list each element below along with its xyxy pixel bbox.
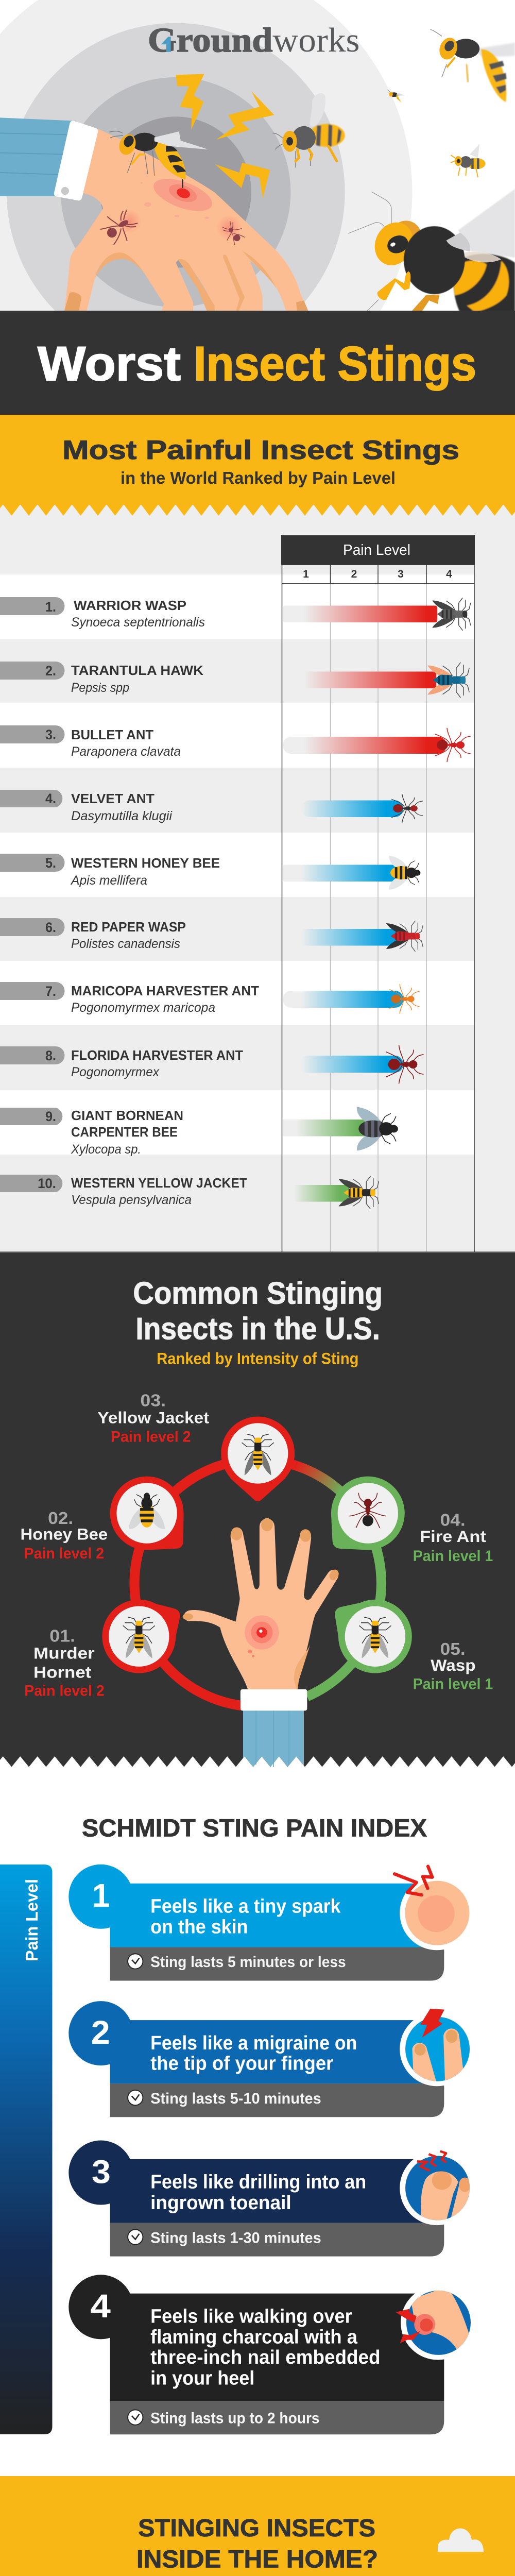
icon: western honey bee <box>389 856 420 890</box>
icon: giant bornean carpenter bee <box>357 1107 398 1150</box>
label: honey bee <box>21 1509 108 1562</box>
row 7: 7. <box>45 984 56 999</box>
section heading: SCHMIDT STING PAIN INDEX <box>82 1815 427 1842</box>
row 8: Pogonomyrmex <box>71 1065 160 1079</box>
section heading: Insects in the U.S. <box>135 1312 380 1346</box>
row 6 <box>0 918 186 951</box>
subtitle band <box>0 415 515 505</box>
row 9: 9. <box>45 1109 56 1124</box>
row 5: WESTERN HONEY BEE <box>71 855 220 871</box>
flying bee, mid <box>272 93 345 167</box>
row 3 <box>0 725 181 759</box>
row 4: Dasymutilla klugii <box>71 809 173 823</box>
label: fire ant <box>413 1511 493 1565</box>
icon: florida harvester ant <box>386 1045 423 1083</box>
row 2: Pepsis spp <box>71 681 129 695</box>
label: wasp: Pain level 1 <box>413 1675 493 1692</box>
pain scale numbers: 4 <box>446 568 452 580</box>
row 9: GIANT BORNEAN <box>71 1108 183 1123</box>
label: murder hornet: Hornet <box>33 1663 92 1682</box>
section heading <box>133 1276 383 1346</box>
row 5 <box>0 854 220 888</box>
row 2 <box>0 662 203 695</box>
card: level 4: three-inch nail embedded <box>150 2346 381 2368</box>
title: Worst <box>38 336 181 391</box>
card: level 2: Feels like a migraine on <box>150 2032 357 2054</box>
label: yellow jacket: Yellow Jacket <box>97 1408 210 1427</box>
card: level 2 <box>68 2001 444 2117</box>
wasp, top right <box>431 29 515 102</box>
card: level 1: Sting lasts 5 minutes or less <box>150 1954 346 1971</box>
card: level 3: Feels like drilling into an <box>150 2171 366 2193</box>
pain level scale bar: Pain Level <box>22 1879 41 1961</box>
panel: schmidt sting pain index <box>0 1815 476 2434</box>
card: level 1: 1 <box>92 1877 110 1914</box>
icon: bullet ant <box>435 728 470 762</box>
row 3: BULLET ANT <box>71 727 153 742</box>
icon: warrior wasp <box>432 598 471 630</box>
row 3: 3. <box>45 727 56 742</box>
lightning bolts <box>176 74 274 198</box>
small wasp <box>388 89 405 103</box>
label: fire ant: 04. <box>440 1511 466 1530</box>
card: level 4: 4 <box>90 2287 111 2325</box>
label: wasp: 05. <box>440 1640 466 1659</box>
label: murder hornet: Murder <box>33 1644 95 1663</box>
icon: ingrown toenail <box>400 2151 476 2225</box>
label: honey bee: Honey Bee <box>21 1525 108 1544</box>
title <box>38 336 476 391</box>
row 1: WARRIOR WASP <box>74 598 186 613</box>
hero illustration <box>0 0 515 429</box>
label: wasp <box>413 1640 493 1692</box>
icon: heel <box>396 2291 471 2360</box>
logo <box>148 22 359 59</box>
row 5: 5. <box>45 855 56 871</box>
pin: murder hornet <box>102 1600 180 1673</box>
pain level header <box>281 535 475 565</box>
card: level 4: in your heel <box>150 2367 254 2389</box>
arm and stung hand <box>0 117 308 311</box>
card: level 3 <box>68 2141 444 2257</box>
pain scale numbers: 3 <box>398 568 404 580</box>
label: murder hornet: Pain level 2 <box>24 1683 105 1700</box>
icon: maricopa harvester ant <box>390 985 419 1013</box>
card: level 4 <box>68 2275 444 2434</box>
row 8: 8. <box>45 1048 56 1063</box>
large foreground bee <box>348 189 515 313</box>
card: level 4: Feels like walking over <box>150 2305 352 2327</box>
card: level 2: Sting lasts 5-10 minutes <box>150 2090 321 2107</box>
row 9 <box>0 1108 183 1157</box>
pin: honey bee <box>110 1477 184 1550</box>
label: murder hornet: 01. <box>49 1626 75 1646</box>
card: level 3: Sting lasts 1-30 minutes <box>150 2230 321 2247</box>
icon: velvet ant <box>392 794 422 822</box>
wasp stinging the hand <box>109 131 209 188</box>
row 10: 10. <box>38 1176 56 1191</box>
row 7: Pogonomyrmex maricopa <box>71 1001 215 1015</box>
pain concentric circles <box>0 0 412 429</box>
section heading: Common Stinging <box>133 1276 383 1311</box>
label: yellow jacket <box>97 1392 210 1446</box>
section heading: INSIDE THE HOME? <box>136 2546 378 2573</box>
icon: finger migraine <box>400 2009 474 2086</box>
section heading: STINGING INSECTS <box>138 2515 375 2542</box>
row 2: 2. <box>45 663 56 679</box>
row 4: VELVET ANT <box>71 791 154 806</box>
card: level 2: the tip of your finger <box>150 2052 333 2074</box>
row 10: WESTERN YELLOW JACKET <box>71 1175 247 1191</box>
ring <box>134 1460 381 1706</box>
pin: wasp <box>335 1600 412 1673</box>
card: level 1: on the skin <box>150 1916 248 1938</box>
row 9: CARPENTER BEE <box>71 1124 178 1140</box>
icon: fingertip spark <box>394 1867 474 1950</box>
row 7 <box>0 982 259 1015</box>
card: level 1 <box>68 1865 444 1981</box>
card: level 3: ingrown toenail <box>150 2192 291 2214</box>
row 1: 1. <box>45 599 56 615</box>
row 3: Paraponera clavata <box>71 744 181 759</box>
card: level 4: Sting lasts up to 2 hours <box>150 2410 320 2427</box>
label: yellow jacket: 03. <box>140 1392 166 1411</box>
pain bars <box>283 606 447 1201</box>
card: level 1: Feels like a tiny spark <box>150 1895 341 1918</box>
title band <box>0 311 515 415</box>
row 8 <box>0 1046 243 1079</box>
label: honey bee: 02. <box>48 1509 73 1528</box>
row 1 <box>0 597 205 630</box>
subtitle heading: Most Painful Insect Stings <box>62 435 459 465</box>
card: level 2: 2 <box>91 2014 110 2051</box>
row 10: Vespula pensylvanica <box>71 1193 192 1207</box>
row 10 <box>0 1175 247 1207</box>
row 6: Polistes canadensis <box>71 937 180 951</box>
label: murder hornet <box>24 1626 105 1700</box>
pin: yellow jacket <box>221 1417 295 1501</box>
icon: tarantula hawk <box>427 663 469 698</box>
row 6: RED PAPER WASP <box>71 919 186 935</box>
hand with sting <box>183 1518 340 1710</box>
small bee <box>451 144 486 177</box>
logo: Ground <box>148 22 272 59</box>
row 2: TARANTULA HAWK <box>71 663 203 678</box>
pin: fire ant <box>331 1477 405 1550</box>
pain level header: Pain Level <box>343 542 410 558</box>
section heading <box>136 2515 378 2573</box>
pain level scale bar <box>0 1865 53 2434</box>
subtitle line: in the World Ranked by Pain Level <box>121 468 396 487</box>
label: fire ant: Fire Ant <box>420 1527 486 1546</box>
panel: stinging insects inside the home <box>0 2476 515 2576</box>
panel: common stinging insects <box>0 1252 515 1767</box>
card: level 4: flaming charcoal with a <box>150 2326 358 2348</box>
icon: western yellow jacket <box>339 1177 379 1209</box>
icon: red paper wasp <box>386 921 423 951</box>
cloud <box>438 2529 484 2552</box>
row 1: Synoeca septentrionalis <box>71 615 205 630</box>
row 5: Apis mellifera <box>70 873 147 888</box>
pain scale numbers: 1 <box>303 568 309 580</box>
title: Insect Stings <box>194 336 476 391</box>
row 4 <box>0 790 173 823</box>
label: honey bee: Pain level 2 <box>24 1545 104 1562</box>
label: fire ant: Pain level 1 <box>413 1548 493 1565</box>
row 6: 6. <box>45 920 56 935</box>
logo: works <box>272 22 359 59</box>
row 9: Xylocopa sp. <box>71 1142 141 1157</box>
row 7: MARICOPA HARVESTER ANT <box>71 983 259 998</box>
section subheading: Ranked by Intensity of Sting <box>157 1349 358 1367</box>
pain scale numbers: 2 <box>351 568 357 580</box>
row 4: 4. <box>45 791 56 806</box>
sleeve and zigzag <box>0 1705 515 1767</box>
panel: pain ranking table <box>0 504 515 1252</box>
card: level 3: 3 <box>92 2153 111 2190</box>
row 8: FLORIDA HARVESTER ANT <box>71 1047 243 1063</box>
label: wasp: Wasp <box>431 1656 476 1674</box>
pain scale numbers <box>303 568 452 580</box>
label: yellow jacket: Pain level 2 <box>111 1429 191 1446</box>
